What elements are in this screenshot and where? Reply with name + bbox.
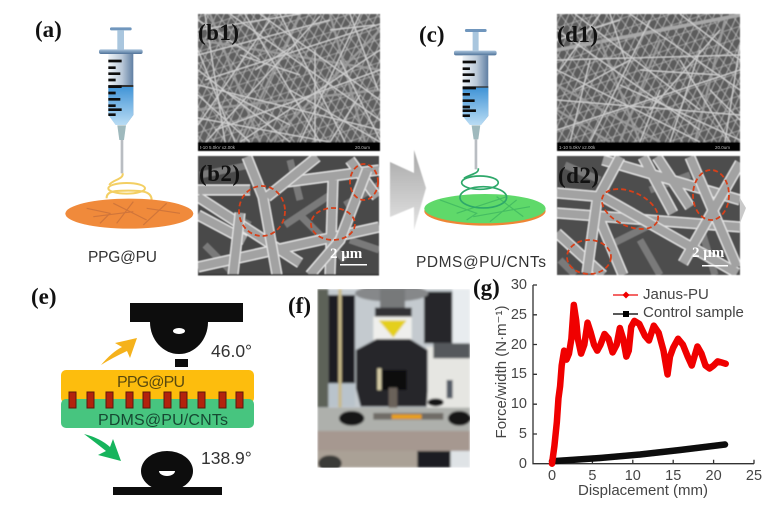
SEM scale text (b1) [200, 145, 370, 150]
SEM image (d2) [557, 156, 740, 275]
x tick labels: 25 [746, 468, 762, 484]
y tick labels: 25 [511, 307, 527, 323]
Janus bilayer schematic: PPG@PU [117, 374, 185, 391]
SEM scale text (b1): 20.0um [355, 145, 370, 150]
axes [533, 285, 754, 464]
x tick labels [548, 468, 762, 484]
y tick labels: 20 [511, 337, 527, 353]
SEM image (d1) [557, 14, 740, 151]
y axis title: Force/width (N·m⁻¹) [493, 306, 510, 438]
arrow: yellow [101, 338, 137, 365]
series: control sample [552, 444, 725, 461]
arrow: green [84, 434, 121, 461]
y tick labels [511, 277, 527, 472]
scale bar (d2) [692, 245, 728, 266]
label (e): (e) [31, 284, 57, 309]
y tick labels: 0 [519, 456, 527, 472]
water droplet top: 46.0 degrees [130, 303, 243, 367]
contact angle 138.9: 138.9° [201, 448, 252, 468]
Janus bilayer schematic: PDMS@PU/CNTs [98, 412, 228, 429]
photo: peel test machine [317, 285, 471, 471]
label (g): (g) [473, 275, 500, 300]
water droplet bottom: 138.9 degrees [113, 451, 222, 495]
y tick labels: 30 [511, 277, 527, 293]
SEM scale text (d1): 1-10 5.0kV x2.00k [559, 145, 596, 150]
icon: syringe with PPG@PU [65, 27, 193, 229]
legend [613, 286, 744, 321]
highlight circles (d2) [567, 170, 729, 274]
label (c): (c) [419, 22, 445, 47]
y tick labels: 5 [519, 426, 527, 442]
label (f): (f) [288, 293, 311, 318]
x tick labels: 15 [665, 468, 681, 484]
chart: force/width vs displacement [493, 277, 762, 499]
legend: Control sample [643, 304, 744, 321]
y tick labels: 10 [511, 396, 527, 412]
SEM scale text (d1) [559, 145, 730, 150]
SEM image (b2) [198, 156, 379, 276]
label (d1): (d1) [557, 22, 598, 47]
scale bar (b2): 2 μm [330, 246, 363, 262]
y tick labels: 15 [511, 366, 527, 382]
legend: Janus-PU [643, 286, 709, 303]
arrow: faint next step [740, 198, 746, 223]
series: Janus-PU [552, 305, 726, 464]
label (b1): (b1) [198, 20, 239, 45]
arrow: process step [390, 150, 426, 230]
caption: PPG@PU: PPG@PU [88, 249, 157, 266]
x tick labels: 20 [706, 468, 722, 484]
x tick labels: 0 [548, 468, 556, 484]
SEM scale text (b1): t-10 5.0kV x2.00k [200, 145, 236, 150]
Janus bilayer schematic [61, 370, 254, 429]
contact angle 46.0: 46.0° [211, 341, 252, 361]
label (b2): (b2) [199, 161, 240, 186]
SEM image (b1) [198, 14, 380, 151]
x axis title: Displacement (mm) [578, 482, 708, 499]
label (d2): (d2) [558, 163, 599, 188]
x tick labels: 5 [588, 468, 596, 484]
x tick labels: 10 [625, 468, 641, 484]
caption: PDMS@PU/CNTs: PDMS@PU/CNTs [416, 254, 546, 271]
SEM scale text (d1): 20.0um [715, 145, 730, 150]
scale bar (d2): 2 μm [692, 245, 725, 261]
label (a): (a) [35, 17, 62, 42]
icon: syringe with PDMS@PU/CNTs [424, 29, 546, 226]
highlight circles (b2) [239, 164, 378, 240]
